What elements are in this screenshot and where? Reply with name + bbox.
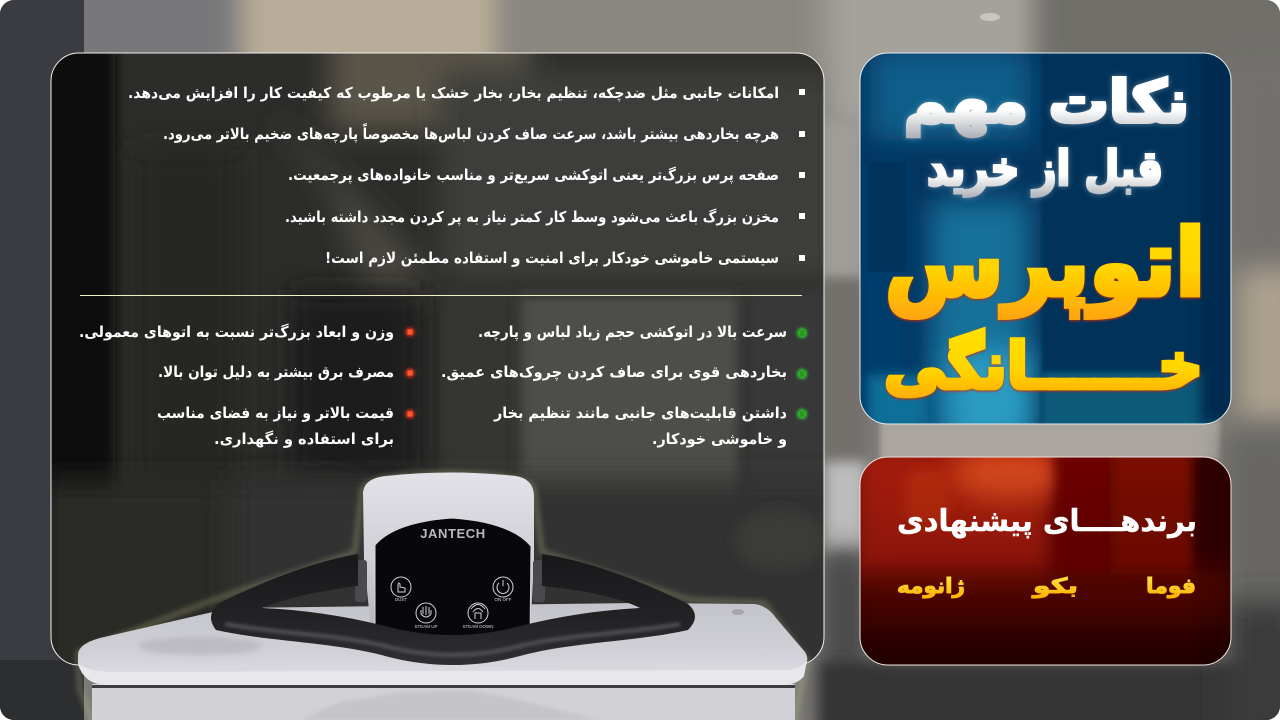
brand: JANTECH: JANTECH xyxy=(420,526,486,541)
con 3: برای استفاده و نگهداری. xyxy=(214,430,394,448)
product: steam press iron xyxy=(78,472,807,720)
brand: Janome: ژانومه xyxy=(897,574,965,598)
heading: press iron: اتوپرس xyxy=(885,210,1205,318)
con 3 xyxy=(157,404,414,448)
tip 1: امکانات جانبی مثل ضدچکه، تنظیم بخار، بخار خشک یا مرطوب که کیفیت کار را افزایش می‌دهد. xyxy=(128,84,779,103)
button labels: DUST xyxy=(395,597,407,602)
heading: before buying: قبل از خرید xyxy=(927,141,1163,197)
panel: main dark info panel xyxy=(40,30,850,680)
control buttons xyxy=(391,577,513,623)
pro 1: سرعت بالا در اتوکشی حجم زیاد لباس و پارچه. xyxy=(478,323,787,342)
lower body xyxy=(92,684,795,720)
tip 5: سیستمی خاموشی خودکار برای امنیت و استفاده مطمئن لازم است! xyxy=(325,249,779,267)
tip 2: هرچه بخاردهی بیشتر باشد، سرعت صاف کردن لباس‌ها مخصوصاً پارچه‌های ضخیم بالاتر می‌رود. xyxy=(163,123,779,144)
brand: Foma: فوما xyxy=(1146,574,1196,598)
pro 3 xyxy=(493,404,807,448)
button labels: STEAM UP xyxy=(414,624,438,629)
brand: Beko: بکو xyxy=(1032,574,1078,598)
tip 3: صفحه پرس بزرگ‌تر یعنی اتوکشی سریع‌تر و مناسب خانواده‌های پرجمعیت. xyxy=(288,166,779,185)
glow outline xyxy=(78,473,807,720)
button labels xyxy=(395,597,512,629)
con 2: مصرف برق بیشتر به دلیل توان بالا. xyxy=(158,363,394,381)
pro 3: داشتن قابلیت‌های جانبی مانند تنظیم بخار xyxy=(493,404,787,422)
top plate xyxy=(78,603,807,688)
pro 3: و خاموشی خودکار. xyxy=(652,430,787,448)
con 1: وزن و ابعاد بزرگ‌تر نسبت به اتوهای معمولی. xyxy=(79,323,394,341)
tips list xyxy=(128,84,805,267)
heading: recommended brands: برندهــــای پیشنهادی xyxy=(897,504,1197,539)
con 3: قیمت بالاتر و نیاز به فضای مناسب xyxy=(157,404,394,422)
pro 2: بخاردهی قوی برای صاف کردن چروک‌های عمیق. xyxy=(441,363,787,382)
cons list xyxy=(79,323,414,448)
panel: red recommended brands card xyxy=(860,456,1232,666)
heading: important points: نکات مهم xyxy=(904,68,1189,137)
panel: blue title card xyxy=(860,50,1240,440)
button labels: STEAM DOWN xyxy=(462,624,494,629)
pros list xyxy=(441,323,807,448)
tip 4: مخزن بزرگ باعث می‌شود وسط کار کمتر نیاز به پر کردن مجدد داشته باشید. xyxy=(285,208,779,227)
button labels: ON OFF xyxy=(494,597,512,602)
console head xyxy=(363,472,534,640)
handle xyxy=(211,554,695,665)
heading: household: خــــــانگی xyxy=(884,329,1203,404)
